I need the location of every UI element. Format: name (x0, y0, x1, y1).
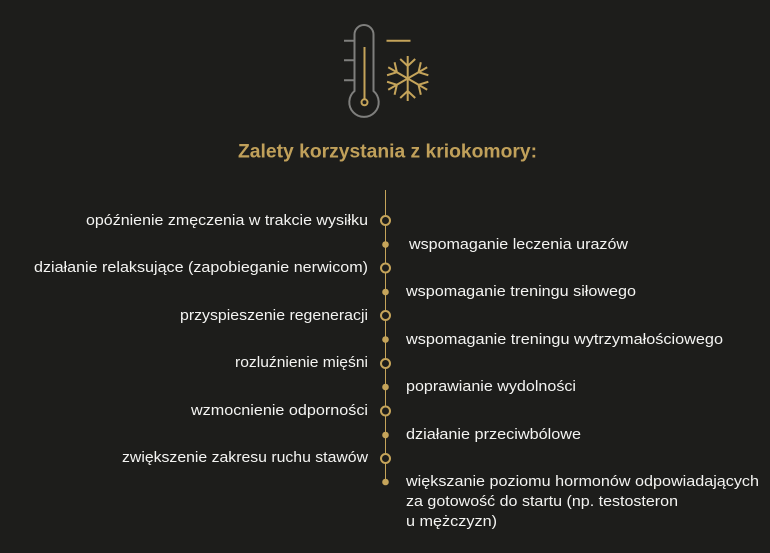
right column: benefits: u mężczyzn) (406, 513, 497, 530)
timeline (381, 190, 390, 485)
right column: benefits: wspomaganie treningu siłowego (405, 283, 636, 300)
right column: benefits: wspomaganie treningu wytrzymałościowego (405, 331, 723, 348)
right column: benefits: poprawianie wydolności (406, 378, 576, 395)
left column: benefits: przyspieszenie regeneracji (180, 307, 368, 324)
right column: benefits (405, 236, 759, 530)
right column: benefits: wspomaganie leczenia urazów (408, 236, 628, 253)
right column: benefits: większanie poziomu hormonów odpowiadających (405, 473, 759, 490)
left column: benefits: działanie relaksujące (zapobieganie nerwicom) (34, 259, 368, 276)
right column: benefits: działanie przeciwbólowe (406, 426, 581, 443)
icon: snowflake (384, 56, 431, 101)
left column: benefits (34, 212, 368, 466)
right column: benefits: za gotowość do startu (np. testosteron (406, 493, 678, 510)
icon: thermometer (344, 25, 379, 117)
left column: benefits: zwiększenie zakresu ruchu stawów (122, 449, 368, 466)
left column: benefits: rozluźnienie mięśni (235, 354, 368, 371)
title: Zalety korzystania z kriokomory: (238, 142, 537, 162)
left column: benefits: wzmocnienie odporności (190, 402, 368, 419)
icon: minus sign (386, 40, 410, 42)
left column: benefits: opóźnienie zmęczenia w trakcie wysiłku (86, 212, 368, 229)
